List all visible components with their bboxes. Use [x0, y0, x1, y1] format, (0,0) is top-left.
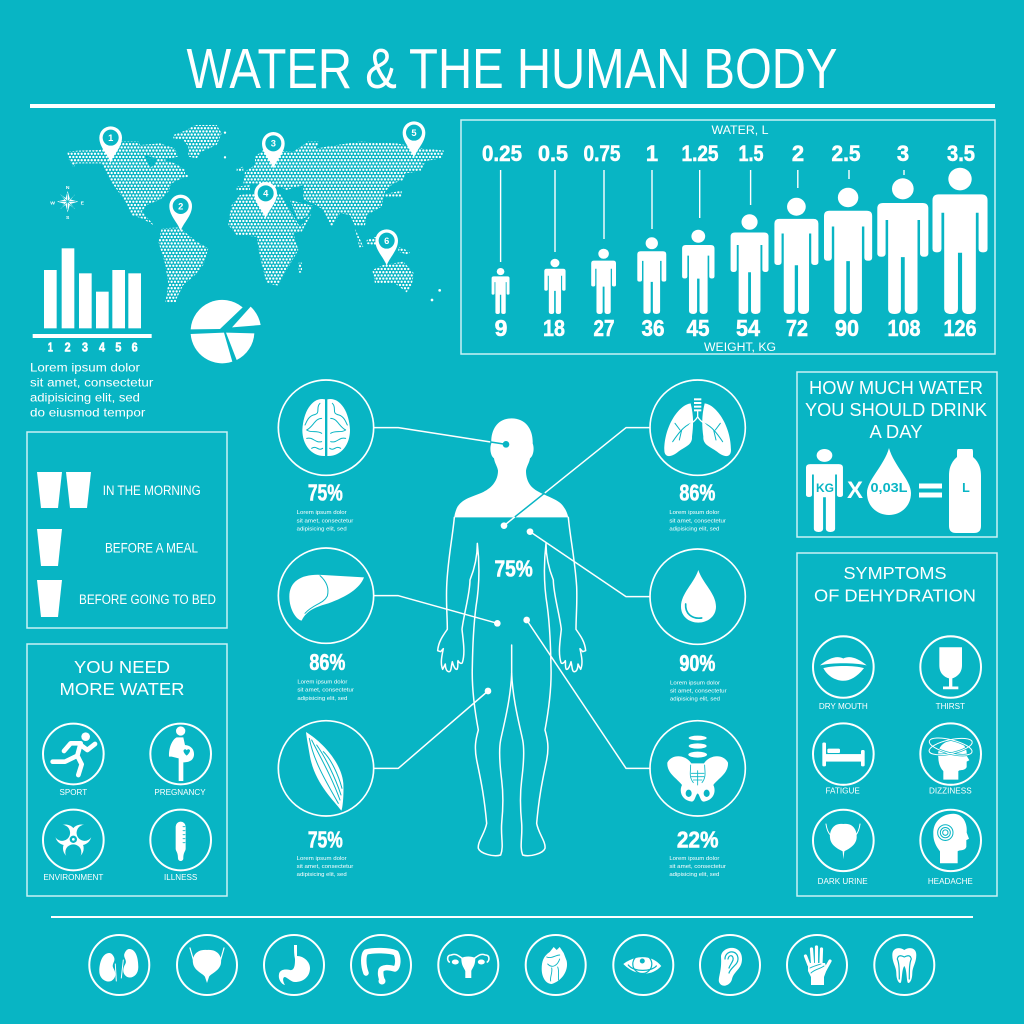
- label: before going to bed: BEFORE GOING TO BED: [79, 592, 216, 607]
- water values: 3: [897, 141, 909, 166]
- bar chart: 1: [48, 340, 53, 354]
- water values: 1: [646, 141, 658, 166]
- map pin 3: 3: [271, 139, 276, 149]
- bar chart: 2: [65, 340, 71, 354]
- weight values: [495, 315, 976, 341]
- description: bones: [669, 856, 726, 878]
- percentage: bones: 22%: [677, 826, 718, 852]
- item: fatigue: FATIGUE: [825, 787, 860, 796]
- connector: blood drop to torso: [527, 528, 650, 597]
- icon: liver: [289, 575, 364, 621]
- text block: lorem ipsum: do eiusmod tempor: [30, 407, 145, 420]
- connector: brain to head: [374, 428, 509, 448]
- panel: when to drink: [27, 432, 227, 628]
- description: liver: adipisicing elit, sed: [297, 696, 347, 702]
- bar chart: 6: [132, 340, 138, 354]
- description: liver: sit amet, consectetur: [297, 688, 354, 694]
- map pin 4: [254, 182, 277, 218]
- panel heading: A DAY: [870, 421, 922, 442]
- icon: pelvis: [667, 736, 728, 802]
- icon: heart: [526, 935, 586, 995]
- icon: drop with 0,03L: [867, 448, 911, 515]
- water values: 3.5: [947, 141, 975, 166]
- description: muscle: adipisicing elit, sed: [297, 872, 347, 878]
- icons drawn at 3x: [813, 636, 981, 886]
- description: brain: sit amet, consectetur: [297, 518, 354, 524]
- icon: compass rose: W: [50, 200, 55, 206]
- icon: tooth: [874, 935, 934, 995]
- percentage: muscle: 75%: [308, 826, 343, 852]
- icon: bladder: [177, 935, 237, 995]
- description: blood: Lorem ipsum dolor: [670, 680, 720, 686]
- map pin 2: [169, 195, 192, 231]
- item: environment: ENVIRONMENT: [43, 873, 103, 882]
- panel heading: YOU NEED: [74, 657, 170, 677]
- item: dry mouth: DRY MOUTH: [819, 702, 868, 711]
- water values: 2.5: [832, 141, 860, 166]
- item: dark urine: [813, 810, 874, 886]
- weight values: 126: [944, 315, 976, 341]
- panel heading: HOW MUCH WATER: [809, 377, 983, 398]
- description: lungs: [669, 510, 726, 532]
- item: sport: [43, 724, 104, 797]
- description: muscle: Lorem ipsum dolor: [297, 856, 347, 862]
- island dots: [185, 131, 441, 301]
- description: bones: adipisicing elit, sed: [669, 872, 719, 878]
- icon: compass rose: N: [66, 185, 70, 191]
- bar chart: 5: [115, 340, 121, 354]
- icon: hand: [787, 935, 847, 995]
- description: liver: [297, 680, 354, 702]
- chart axis label: weight: WEIGHT, KG: [704, 342, 776, 354]
- callout: brain: [278, 380, 374, 532]
- bar chart: 3: [82, 340, 88, 354]
- percentage: brain: 75%: [308, 480, 343, 506]
- description: muscle: sit amet, consectetur: [297, 864, 354, 870]
- panel heading: YOU SHOULD DRINK: [805, 399, 988, 420]
- text block: lorem ipsum: [30, 362, 153, 420]
- connector: lungs to chest: [501, 428, 650, 529]
- description: muscle: [297, 856, 354, 878]
- chart heading: water: WATER, L: [712, 125, 769, 137]
- icon: stomach: [264, 935, 324, 995]
- item: illness: ILLNESS: [164, 873, 197, 882]
- map pin 5: [403, 121, 425, 158]
- item: environment: [43, 810, 104, 882]
- description: lungs: Lorem ipsum dolor: [669, 510, 720, 516]
- percentage: liver: 86%: [309, 649, 345, 675]
- map pin 6: [375, 229, 398, 266]
- dotted world map: [60, 125, 448, 301]
- description: brain: Lorem ipsum dolor: [297, 510, 347, 516]
- icon: colon: [351, 935, 411, 995]
- weight values: 54: [736, 315, 760, 341]
- item: headache: HEADACHE: [928, 877, 973, 886]
- icon: person with kg: [806, 449, 843, 532]
- description: blood: adipisicing elit, sed: [670, 697, 720, 703]
- water values: 2: [792, 141, 804, 166]
- icon: kidneys: [89, 935, 149, 995]
- equals sign: [919, 484, 942, 498]
- icon: brain: [302, 399, 350, 456]
- water values: [482, 141, 975, 166]
- icon row: organs: [89, 935, 934, 995]
- callout: lungs: [650, 380, 745, 532]
- item: pregnancy: [150, 724, 211, 797]
- multiply sign: X: [847, 477, 863, 504]
- icons drawn at 3x: [43, 724, 211, 882]
- item: headache: [920, 810, 981, 886]
- body diagram with organ callouts: [278, 380, 745, 878]
- icon: two glasses, morning: [37, 472, 91, 508]
- world map with pins, compass, bar chart and pie chart: [30, 121, 448, 420]
- panel: how much water formula: [797, 372, 997, 537]
- connector: muscle to thigh: [374, 688, 491, 768]
- title rule: [30, 104, 995, 108]
- icon: bottle with L: L: [962, 481, 970, 495]
- bar chart: [33, 248, 152, 354]
- weight values: 108: [888, 315, 921, 341]
- description: bones: sit amet, consectetur: [669, 864, 726, 870]
- weight values: 72: [786, 315, 808, 341]
- water values: 0.75: [584, 141, 620, 166]
- text block: lorem ipsum: Lorem ipsum dolor: [30, 362, 140, 375]
- weight values: 36: [642, 315, 664, 341]
- title: WATER & THE HUMAN BODY: [186, 37, 838, 101]
- text block: lorem ipsum: sit amet, consectetur: [30, 377, 153, 390]
- panel heading: [814, 563, 976, 606]
- connector: bones to hip: [523, 617, 650, 768]
- panel heading: SYMPTOMS: [844, 563, 946, 583]
- icon: uterus: [438, 935, 498, 995]
- item: thirst: [920, 636, 981, 711]
- description: blood: [670, 680, 727, 703]
- icon: glass, meal: [37, 529, 62, 566]
- map pin 1: [99, 126, 122, 163]
- map pin 5: 5: [411, 128, 417, 138]
- text block: lorem ipsum: adipisicing elit, sed: [30, 392, 140, 405]
- map pin 3: [262, 132, 285, 168]
- percentage: blood: 90%: [679, 650, 715, 676]
- label: before a meal: BEFORE A MEAL: [105, 540, 198, 556]
- body water percentage: 75%: [494, 556, 533, 582]
- item: fatigue: [813, 723, 874, 796]
- weight values: 90: [835, 315, 859, 341]
- connector: liver to abdomen: [374, 596, 501, 627]
- map pin 4: 4: [263, 189, 269, 199]
- icon: person with kg: KG: [816, 481, 834, 495]
- description: bones: Lorem ipsum dolor: [669, 856, 720, 862]
- water values: 0.5: [538, 141, 568, 166]
- panel heading: MORE WATER: [60, 679, 184, 699]
- water values: 0.25: [482, 141, 522, 166]
- description: brain: adipisicing elit, sed: [297, 526, 347, 532]
- weight values: 27: [594, 315, 614, 341]
- pie chart: [191, 300, 261, 363]
- icon: compass rose: E: [81, 200, 85, 206]
- icon: compass rose: [50, 185, 85, 221]
- icon: ear: [700, 935, 760, 995]
- item: sport: SPORT: [59, 788, 87, 797]
- panel: water by weight chart: [461, 120, 995, 354]
- water values: 1.25: [682, 141, 718, 166]
- callout: muscle: [278, 721, 374, 878]
- item: thirst: THIRST: [936, 702, 965, 711]
- map pin 2: 2: [178, 201, 183, 211]
- item: dizziness: DIZZINESS: [929, 787, 972, 796]
- icon: compass rose: S: [66, 215, 70, 221]
- item: pregnancy: PREGNANCY: [154, 788, 206, 797]
- icon: lungs: [664, 398, 731, 456]
- item: illness: [150, 810, 211, 882]
- description: lungs: adipisicing elit, sed: [669, 526, 719, 532]
- panel heading: [805, 377, 988, 442]
- weight values: 45: [686, 315, 710, 341]
- water values: 1.5: [738, 141, 764, 166]
- panel heading: OF DEHYDRATION: [814, 586, 976, 606]
- description: blood: sit amet, consectetur: [670, 688, 727, 694]
- icon: glass, bedtime: [37, 580, 62, 617]
- icon: bottle with L: [949, 449, 981, 533]
- icon: eye: [613, 935, 673, 995]
- leader lines: [501, 170, 904, 262]
- description: brain: [297, 510, 354, 532]
- description: lungs: sit amet, consectetur: [669, 518, 726, 524]
- label: in the morning: IN THE MORNING: [103, 483, 201, 498]
- bar chart: 4: [99, 340, 105, 354]
- human body figure: [438, 418, 586, 856]
- icon: water drop: [681, 570, 716, 623]
- callout: liver: [278, 548, 374, 702]
- weight values: 9: [495, 315, 507, 341]
- panel heading: [60, 657, 184, 699]
- icon: muscle: [306, 732, 343, 811]
- icon: drop with 0,03L: 0,03L: [870, 481, 908, 495]
- person figures: [492, 168, 988, 314]
- callout: blood: [650, 549, 745, 703]
- percentage: lungs: 86%: [679, 480, 715, 506]
- panel: symptoms of dehydration: [797, 553, 997, 896]
- item: dry mouth: [813, 636, 874, 711]
- bottom rule: [51, 916, 973, 918]
- item: dark urine: DARK URINE: [818, 877, 868, 886]
- description: liver: Lorem ipsum dolor: [297, 680, 348, 686]
- callout: bones: [650, 721, 745, 878]
- map pin 1: 1: [108, 133, 113, 143]
- weight values: 18: [543, 315, 565, 341]
- panel: you need more water: [27, 644, 227, 896]
- map pin 6: 6: [384, 236, 389, 246]
- item: dizziness: [920, 723, 981, 796]
